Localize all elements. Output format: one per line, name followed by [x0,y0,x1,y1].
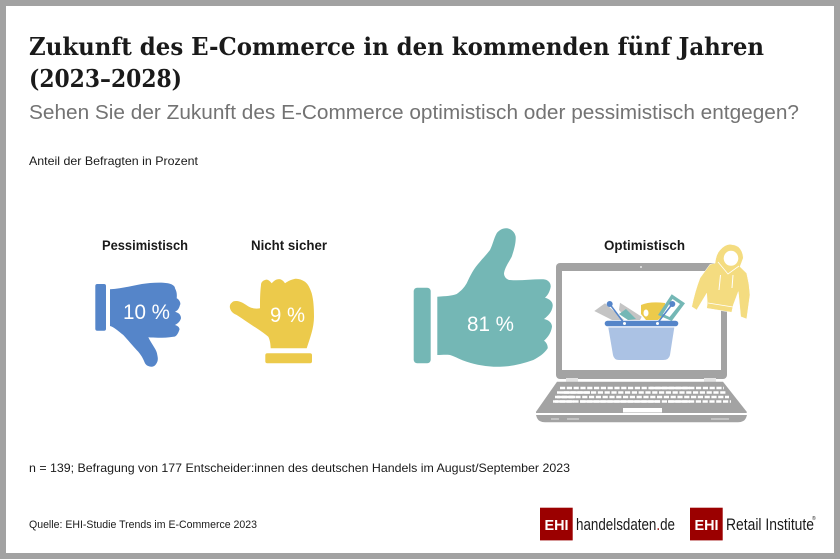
logo: EHI Retail Institute [690,508,816,540]
logo: EHI handelsdaten.de [540,508,675,540]
hoodie [692,244,750,319]
sample note: n = 139; Befragung von 177 Entscheider:innen des deutschen Handels im August/September 2023 [29,461,570,475]
value: 9 %: 9 % [270,304,305,327]
subtitle: Sehen Sie der Zukunft des E-Commerce optimistisch oder pessimistisch entgegen? [29,102,799,124]
icon: thumb down blue with 10 % [95,283,181,367]
logo: EHI Retail Institute: Retail Institute [726,515,814,534]
label: Pessimistisch: Pessimistisch [102,238,188,253]
icon: laptop with shopping basket [536,244,750,422]
title [29,32,764,93]
title: (2023–2028) [29,64,182,93]
label: Nicht sicher: Nicht sicher [251,238,328,253]
source: Quelle: EHI-Studie Trends im E-Commerce 2023 [29,519,257,531]
laptop base [536,378,747,422]
basket contents [594,294,685,321]
logo: EHI Retail Institute: ® [812,515,816,522]
logo: EHI Retail Institute: EHI [694,517,718,534]
logo: EHI handelsdaten.de: handelsdaten.de [576,515,675,534]
logo: EHI handelsdaten.de: EHI [544,517,568,534]
laptop screen [556,263,727,379]
label: Optimistisch: Optimistisch [604,238,685,253]
icon: thumb up teal with 81 % [414,228,553,367]
unit note: Anteil der Befragten in Prozent [29,154,199,168]
value: 10 %: 10 % [123,301,170,324]
icon: thumb sideways yellow with 9 % [230,279,314,363]
title: Zukunft des E-Commerce in den kommenden fünf Jahren [29,32,764,61]
value: 81 %: 81 % [467,313,514,336]
shopping basket [605,301,678,360]
